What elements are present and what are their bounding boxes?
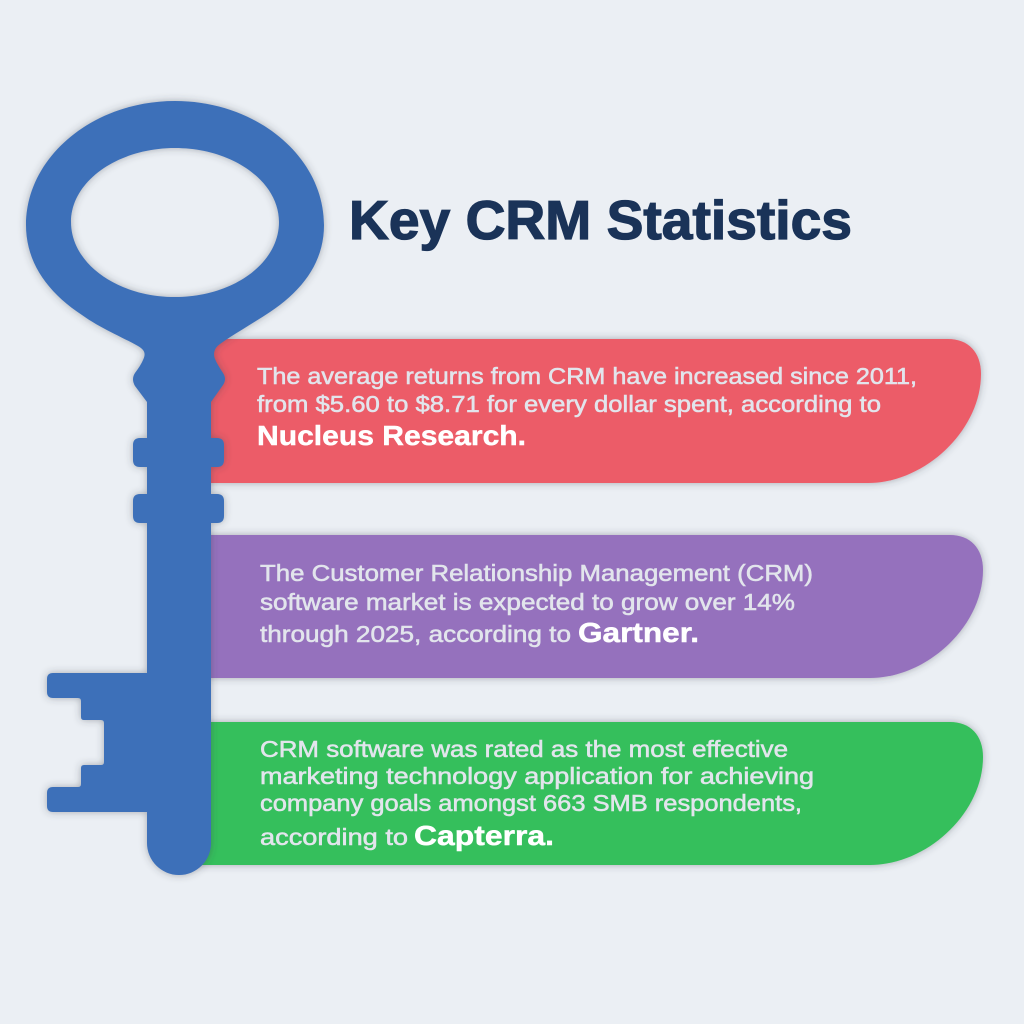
- text: Capterra statistic: marketing technology application for achieving: [260, 763, 814, 789]
- text: Nucleus Research statistic: The average returns from CRM have increased since 2011,: [257, 363, 917, 389]
- text: Gartner statistic: [260, 560, 813, 648]
- text: Capterra statistic: CRM software was rated as the most effective: [260, 736, 788, 762]
- panel: Capterra statistic: [170, 722, 983, 865]
- text: Capterra statistic: according to: [260, 824, 408, 850]
- text: Capterra statistic: [260, 736, 814, 851]
- text: Gartner statistic: through 2025, according to: [260, 621, 571, 647]
- panel: Nucleus Research statistic: [190, 339, 981, 483]
- text: Gartner statistic: The Customer Relationship Management (CRM): [260, 560, 813, 586]
- text: Nucleus Research statistic: Nucleus Research.: [257, 420, 526, 451]
- title: Key CRM Statistics: [349, 189, 852, 251]
- text: Gartner statistic: software market is expected to grow over 14%: [260, 589, 795, 615]
- text: Capterra statistic: company goals amongst 663 SMB respondents,: [260, 790, 802, 816]
- panel: Gartner statistic: [190, 535, 983, 678]
- text: Nucleus Research statistic: from $5.60 to $8.71 for every dollar spent, according to: [257, 391, 881, 417]
- icon: key: [26, 101, 324, 875]
- text: Capterra statistic: Capterra.: [414, 820, 554, 851]
- text: Nucleus Research statistic: [257, 363, 917, 451]
- text: Gartner statistic: Gartner.: [578, 617, 699, 648]
